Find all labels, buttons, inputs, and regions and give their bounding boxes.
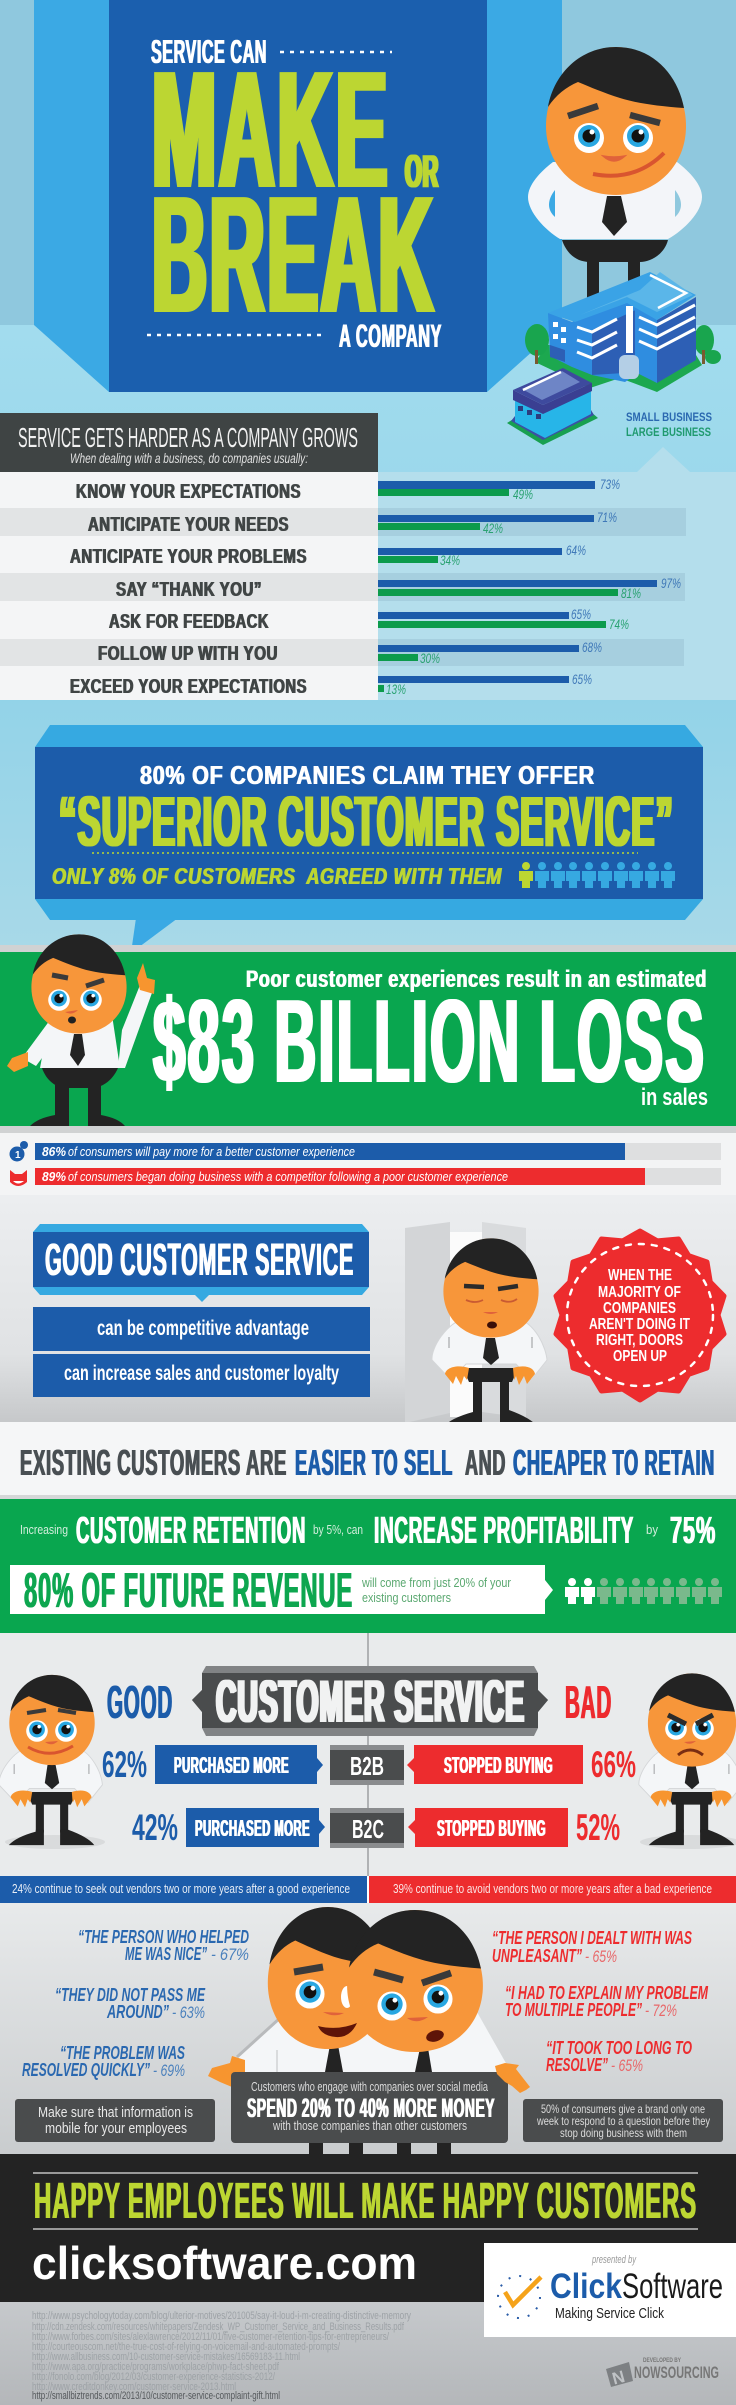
callout: red starburst badge: COMPANIES [603, 1300, 676, 1317]
panel: bad experience strip [369, 1876, 736, 1903]
bar chart: small vs large business: 71% [597, 509, 617, 525]
panel: list of service behaviours [0, 472, 378, 700]
row: B2B comparison: 62% [102, 1744, 147, 1785]
icon: right hand over callout [495, 2063, 530, 2093]
panel: retention and revenue green band [0, 1499, 736, 1633]
bar chart: small vs large business: 13% [386, 681, 406, 697]
callout: mobile information [15, 2099, 215, 2142]
callout: red starburst badge: MAJORITY OF [598, 1284, 681, 1301]
panel: retention and revenue green band: Increasing [20, 1522, 68, 1537]
subheading: When dealing with a business, do companies usually: [70, 450, 308, 466]
panel: retention and revenue green band: CUSTOMER RETENTION [76, 1510, 306, 1552]
row: B2B comparison: STOPPED BUYING [444, 1752, 553, 1778]
icon: blue like badge [10, 1141, 28, 1162]
text: only 8% agreed: ONLY 8% OF CUSTOMERS AGREED WITH THEM [52, 863, 502, 889]
text block: source urls: http://www.apa.org/practice/programs/workplace/phwp-fact-sheet.pdf [32, 2361, 280, 2373]
logo: nowsourcing [606, 2358, 719, 2388]
logo: nowsourcing: DEVELOPED BY [643, 2358, 681, 2364]
row: B2B comparison: 66% [591, 1744, 636, 1785]
quotes: good service reasons: “THE PROBLEM WAS [60, 2043, 185, 2063]
row: B2C comparison [132, 1807, 620, 1848]
panel: hero title box: OR [405, 145, 439, 197]
icon: happy man left [0, 1675, 105, 1849]
callout: 80% of future revenue: existing customers [362, 1590, 451, 1605]
background: sources footer [0, 2302, 736, 2405]
logo: clicksoftware: Making Service Click [555, 2305, 664, 2322]
panel: existing customers: EASIER TO SELL [295, 1442, 453, 1483]
bar: 86 percent pay more: 86% [42, 1144, 66, 1159]
legend: small and large business [626, 412, 712, 439]
panel: good experience strip: 24% continue to seek out vendors two or more years after a good experience [12, 1881, 350, 1896]
quotes: good service reasons: RESOLVED QUICKLY” [22, 2060, 150, 2080]
panel: list of service behaviours: ANTICIPATE YOUR NEEDS [88, 514, 289, 536]
quotes: bad service reasons: TO MULTIPLE PEOPLE” [505, 2000, 642, 2020]
text block: source urls: http://www.forbes.com/sites/alexlawrence/2012/11/01/five-customer-retention-tips-for-entrepreneurs/ [32, 2331, 390, 2343]
benefit: competitive advantage [33, 1307, 370, 1351]
callout: 80% of future revenue: will come from just 20% of your [361, 1575, 512, 1590]
bar chart: small vs large business: 81% [621, 585, 641, 601]
callout: social media spend: with those companies than other customers [272, 2119, 467, 2133]
row: B2C comparison: B2C [352, 1814, 384, 1844]
row: B2B comparison: PURCHASED MORE [174, 1752, 289, 1778]
callout: social media spend [231, 2072, 508, 2143]
text block: source urls: http://fonolo.com/blog/2012/03/customer-experience-statistics-2012/ [32, 2371, 276, 2383]
panel: billion loss green band [0, 945, 736, 1133]
text: BAD [565, 1676, 612, 1728]
logo: nowsourcing: N [610, 2367, 627, 2388]
background: good customer service section [0, 1195, 736, 1422]
icon: angry man right [639, 1673, 736, 1849]
icon: two men side by side [208, 1907, 507, 2157]
callout: mobile information: Make sure that information is [38, 2104, 193, 2121]
quotes: bad service reasons: - 72% [645, 2001, 677, 2020]
panel: existing customers [0, 1422, 736, 1499]
callout: social media spend: SPEND 20% TO 40% MORE MONEY [247, 2093, 495, 2123]
benefit: sales and loyalty: can increase sales and customer loyalty [64, 1362, 339, 1385]
row: B2C comparison: STOPPED BUYING [437, 1815, 546, 1841]
callout: mobile information: mobile for your employees [45, 2120, 187, 2137]
background: good vs bad section [0, 1633, 736, 1876]
row: B2B comparison: B2B [350, 1751, 384, 1781]
quotes: bad service reasons: RESOLVE” [546, 2055, 608, 2075]
icon: smiling man standing behind building [528, 47, 702, 303]
panel: chart background [378, 447, 736, 700]
bar: 86 percent pay more [35, 1143, 721, 1160]
bar: 86 percent pay more: of consumers will pay more for a better customer experience [68, 1144, 355, 1159]
quotes: good service reasons: - 67% [211, 1945, 249, 1964]
bar chart: small vs large business: 97% [661, 575, 681, 591]
icon: pointing man [7, 934, 155, 1126]
row: B2C comparison: 42% [132, 1807, 178, 1848]
panel: list of service behaviours: ANTICIPATE YOUR PROBLEMS [70, 546, 307, 568]
quotes: good service reasons: AROUND” [106, 2002, 169, 2022]
logo: clicksoftware [484, 2243, 736, 2337]
bar chart: small vs large business: 34% [440, 552, 460, 568]
text block: source urls [32, 2310, 411, 2402]
bar: 89 percent competitor [35, 1168, 721, 1185]
callout: one week response [523, 2099, 723, 2142]
background: quotes section [0, 1903, 736, 2155]
row: B2C comparison: PURCHASED MORE [195, 1815, 310, 1841]
text block: source urls: http://courteouscom.net/the-true-cost-of-relying-on-voicemail-and-automated-prompts/ [32, 2341, 341, 2353]
panel: hero title box [34, 0, 562, 392]
legend: small and large business: LARGE BUSINESS [626, 427, 711, 439]
panel: existing customers: AND [465, 1442, 506, 1483]
panel: list of service behaviours: SAY “THANK YOU” [116, 579, 262, 601]
quotes: good service reasons: - 63% [172, 2003, 205, 2022]
panel: list of service behaviours: KNOW YOUR EXPECTATIONS [76, 481, 301, 503]
quotes: good service reasons: ME WAS NICE” [125, 1944, 207, 1964]
icon: man in open doors [405, 1222, 547, 1427]
quotes: good service reasons: “THE PERSON WHO HELPED [78, 1927, 249, 1947]
callout: one week response: stop doing business with them [560, 2126, 687, 2140]
panel: list of service behaviours: EXCEED YOUR EXPECTATIONS [70, 676, 307, 698]
background: light blue floor [0, 325, 736, 950]
panel: list of service behaviours: FOLLOW UP WITH YOU [98, 643, 278, 665]
heading: SERVICE GETS HARDER AS A COMPANY GROWS [18, 422, 358, 453]
callout: red starburst badge: OPEN UP [613, 1348, 667, 1365]
quotes: bad service reasons [492, 1928, 709, 2075]
icon: red angry face [10, 1170, 27, 1186]
bar: 89 percent competitor: 89% [42, 1169, 66, 1184]
panel: dark footer [0, 2154, 736, 2302]
quotes: bad service reasons: - 65% [611, 2056, 643, 2075]
panel: hero title box: MAKE [152, 37, 390, 223]
bar chart: small vs large business: 68% [582, 639, 602, 655]
website: clicksoftware.com [32, 2237, 417, 2289]
bar chart: small vs large business: 74% [609, 616, 629, 632]
panel: retention and revenue green band: by [646, 1522, 658, 1537]
logo: clicksoftware: Click [550, 2267, 622, 2306]
panel: hero title box: SERVICE CAN [151, 33, 267, 70]
logo: clicksoftware: presented by [591, 2254, 637, 2266]
bar chart: small vs large business: 30% [420, 650, 440, 666]
bar chart: small vs large business: 42% [483, 520, 503, 536]
quotes: good service reasons: “THEY DID NOT PASS ME [55, 1985, 206, 2005]
quotes: bad service reasons: - 65% [585, 1947, 617, 1966]
callout: red starburst badge: RIGHT, DOORS [596, 1332, 683, 1349]
callout: 80% of future revenue: 80% OF FUTURE REVENUE [24, 1564, 353, 1618]
text block: source urls: http://www.allbusiness.com/10-customer-service-mistakes/16569183-11.html [32, 2351, 300, 2363]
text block: source urls: http://www.psychologytoday.com/blog/ulterior-motives/201005/say-it-loud-i-m-creating-distinctive-memory [32, 2310, 411, 2322]
quotes: good service reasons: - 69% [153, 2061, 185, 2080]
benefit: competitive advantage: can be competitive advantage [97, 1317, 309, 1340]
background: hero wall [0, 0, 736, 325]
row: B2C comparison: 52% [576, 1807, 620, 1848]
panel: consumer stat bars [0, 1133, 736, 1195]
text: in sales: in sales [641, 1084, 708, 1111]
icon: blue like badge: 1 [15, 1150, 21, 1161]
panel: good experience strip [0, 1876, 367, 1903]
row: B2B comparison [102, 1744, 636, 1785]
bar chart: small vs large business: 64% [566, 542, 586, 558]
panel: existing customers: EXISTING CUSTOMERS ARE [20, 1442, 287, 1483]
benefit: sales and loyalty [33, 1354, 370, 1397]
bar chart: small vs large business: 65% [572, 671, 592, 687]
callout: red starburst badge [556, 1231, 724, 1400]
quotes: good service reasons [22, 1927, 249, 2080]
bar: 89 percent competitor: of consumers began doing business with a competitor following a poor customer experience [68, 1169, 508, 1184]
quotes: bad service reasons: UNPLEASANT” [492, 1946, 582, 1966]
panel: superior customer service speech banner [35, 725, 703, 953]
callout: social media spend: Customers who engage with companies over social media [251, 2079, 489, 2094]
text block: source urls: http://smallbiztrends.com/2013/10/customer-service-complaint-gift.html [32, 2390, 280, 2402]
bar chart: small vs large business: 65% [571, 606, 591, 622]
icon row: two in ten people highlighted [565, 1578, 722, 1604]
panel: service gets harder header [0, 413, 378, 472]
bar chart: small vs large business [378, 476, 681, 697]
text: GOOD [107, 1676, 173, 1728]
text block: source urls: http://cdn.zendesk.com/resources/whitepapers/Zendesk_WP_Customer_Service_and_Business_Results.pdf [32, 2321, 405, 2333]
heading: a company: A COMPANY [339, 318, 442, 354]
panel: retention and revenue green band: by 5%, can [313, 1522, 363, 1537]
text block: source urls: http://www.creditdonkey.com/customer-service-2013.html [32, 2381, 236, 2393]
bar chart: small vs large business: 49% [513, 486, 533, 502]
icon row: one in ten people highlighted [519, 862, 675, 888]
callout: red starburst badge: AREN'T DOING IT [589, 1316, 690, 1333]
panel: good customer service: GOOD CUSTOMER SERVICE [45, 1234, 354, 1285]
bar chart: small vs large business: 73% [600, 476, 620, 492]
panel: list of service behaviours: ASK FOR FEEDBACK [109, 611, 269, 633]
heading: customer service banner [192, 1666, 548, 1736]
icon: isometric large and small business buildings [507, 272, 721, 445]
legend: small and large business: SMALL BUSINESS [626, 412, 712, 424]
panel: good customer service [33, 1224, 370, 1397]
text: 80% claim: 80% OF COMPANIES CLAIM THEY OFFER [140, 760, 595, 790]
callout: red starburst badge: WHEN THE [608, 1267, 672, 1284]
